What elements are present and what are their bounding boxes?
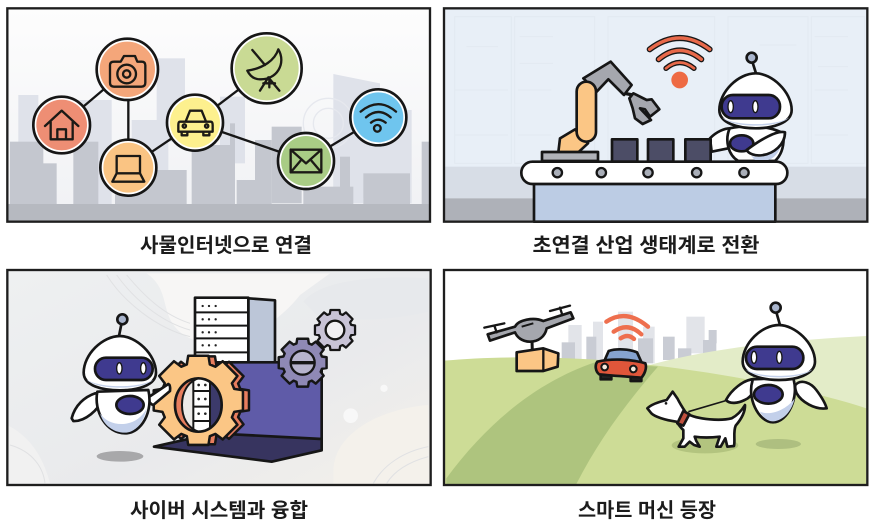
city skyline: [7, 58, 430, 222]
gear: large orange: [154, 356, 249, 445]
soft background: [7, 270, 431, 485]
icon: camera: [97, 39, 158, 100]
icon: satellite dish: [232, 33, 302, 103]
robot: [72, 314, 170, 433]
panel border: [444, 8, 867, 222]
sky: [444, 270, 867, 485]
robot: [710, 53, 792, 161]
icon: laptop: [100, 140, 156, 196]
bokeh dots: [343, 385, 388, 423]
distant city: [562, 312, 717, 363]
network links: [62, 68, 378, 168]
heading: smart machines: 스마트 머신 등장: [578, 499, 716, 522]
laptop: [154, 362, 322, 462]
heading: IoT connection: 사물인터넷으로 연결: [140, 234, 312, 257]
panel background: [7, 8, 430, 222]
icon: car: [167, 95, 223, 151]
robot: [726, 303, 827, 422]
icon: car wifi signal: [606, 316, 648, 339]
road: [446, 362, 658, 484]
conveyor belt: [521, 162, 787, 184]
product boxes: [612, 139, 711, 162]
server rack: [195, 298, 275, 363]
panel border: [7, 270, 431, 485]
drone: [484, 306, 573, 351]
robot arm: [542, 62, 659, 161]
factory background: [444, 8, 867, 222]
icon: home: [33, 97, 90, 153]
robot shadow: [97, 451, 143, 462]
ground shadows: [672, 437, 801, 453]
dog: [647, 392, 745, 447]
far hill: [638, 336, 866, 412]
red car: [596, 349, 646, 381]
icon: wifi signal: [650, 38, 710, 88]
gear: small lilac: [315, 310, 355, 350]
icon: mail: [278, 133, 334, 189]
conveyor table: [534, 183, 775, 222]
near hill: [444, 357, 866, 485]
leash: [688, 400, 728, 412]
panel: smart machines: [444, 270, 867, 485]
parcel: [517, 348, 558, 371]
panel: IoT connection: [7, 8, 430, 222]
gear: medium purple: [279, 339, 327, 387]
panel: cyber system fusion: [7, 270, 431, 485]
panel border: [444, 270, 867, 485]
heading: hyper-connected industry: 초연결 산업 생태계로 전환: [532, 234, 760, 257]
heading: cyber system fusion: 사이버 시스템과 융합: [130, 499, 308, 522]
panel: hyper-connected industry: [444, 8, 867, 222]
icon: wifi: [350, 89, 406, 145]
panel border: [7, 8, 430, 222]
